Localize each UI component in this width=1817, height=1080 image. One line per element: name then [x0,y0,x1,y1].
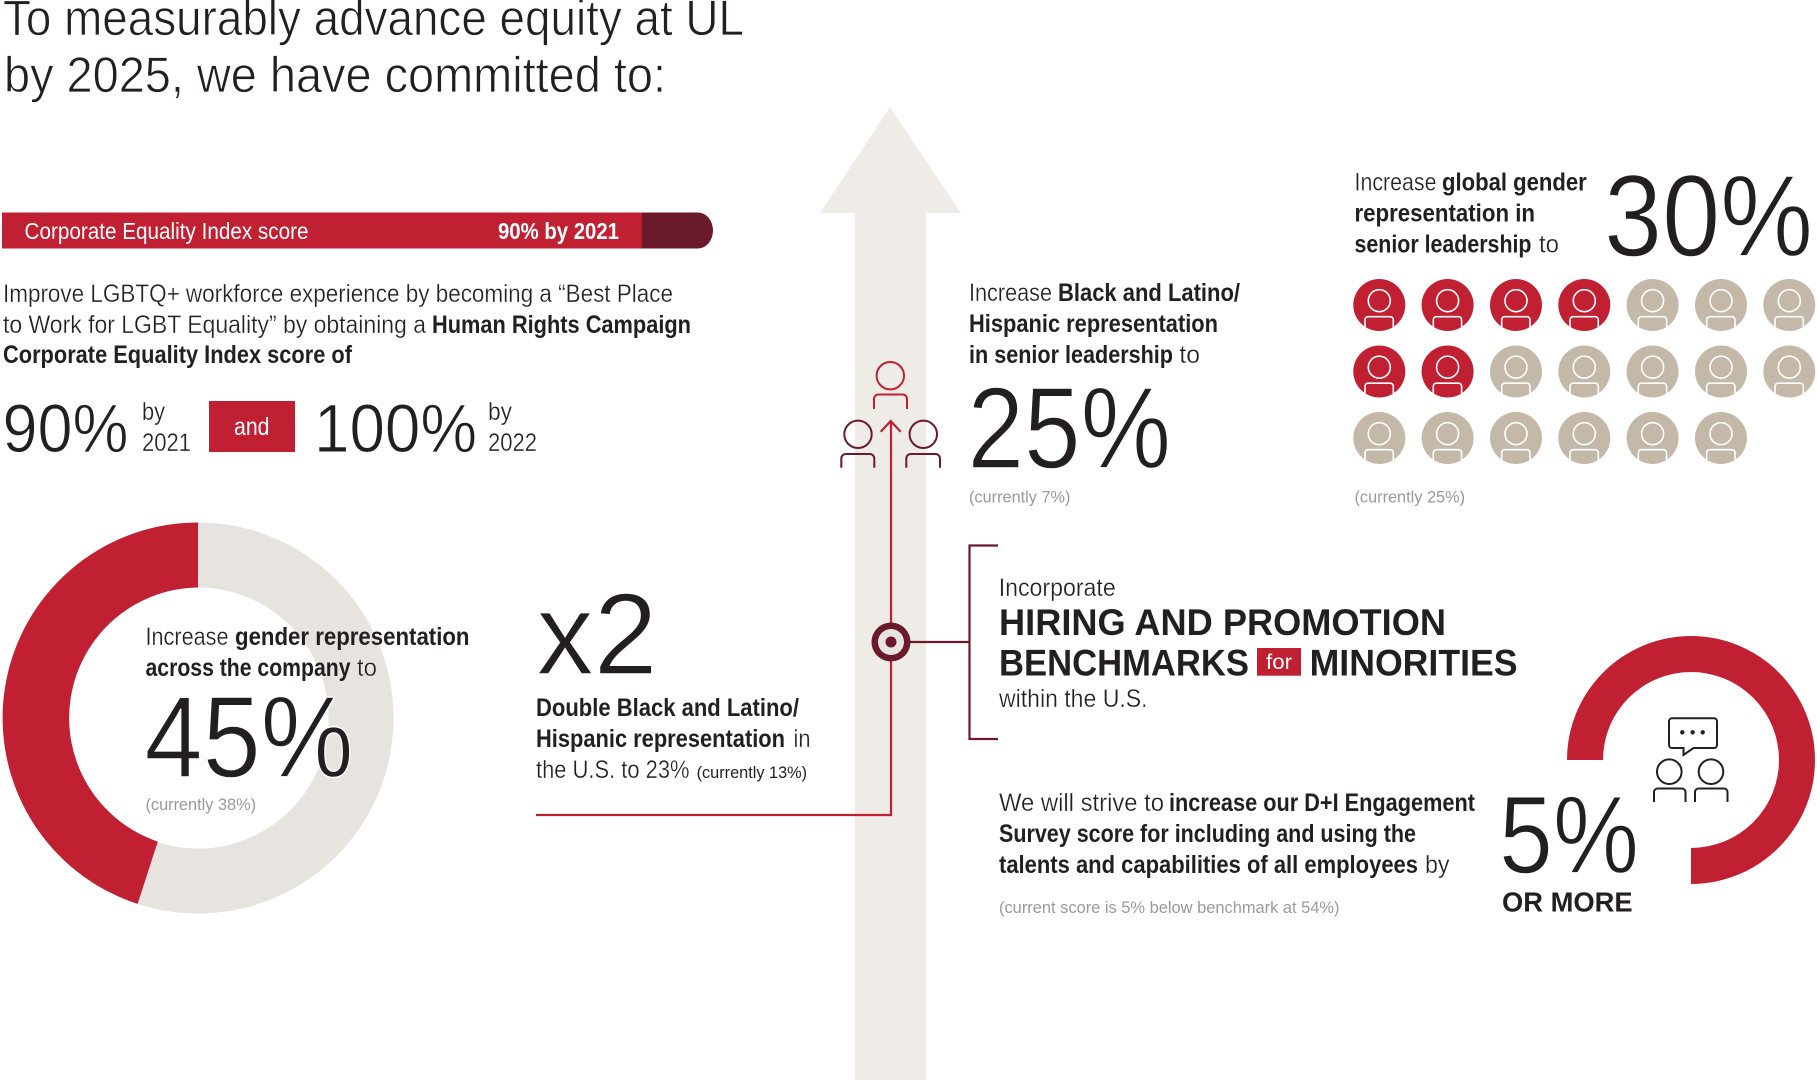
text: Black and Latino/Hispanic senior leadership 25%: in senior leadership [969,341,1173,369]
stat: x2 double representation: in [794,725,810,753]
text: D+I engagement survey: increase our D+I Engagement [1169,789,1476,817]
stat: 90% by 2021 and 100% by 2022 [2,390,537,467]
text: Black and Latino/Hispanic senior leadership 25% [968,279,1240,507]
text: global gender representation 30%: representation in [1354,200,1535,228]
stat: x2 double representation: the U.S. to 23% [536,756,690,784]
text: Black and Latino/Hispanic senior leadership 25%: 25% [968,363,1171,493]
note: currently 25%: (currently 25%) [1354,488,1465,507]
stat: 90% by 2021 and 100% by 2022: and [234,413,270,441]
text: gender representation target: 45% [144,672,354,802]
text: D+I engagement survey: (current score is 5% below benchmark at 54%) [999,898,1340,917]
text: gender representation target: to [357,654,377,682]
text: D+I engagement survey [999,789,1476,917]
stat: x2 double representation: Hispanic representation [536,725,785,753]
text: hiring and promotion benchmarks [998,574,1518,713]
stat: 90% by 2021 and 100% by 2022: 100% [314,390,477,467]
text: Black and Latino/Hispanic senior leadership 25%: to [1179,341,1200,369]
text: hiring and promotion benchmarks: Incorporate [999,574,1116,602]
text: D+I engagement survey: Survey score for including and using the [999,820,1416,848]
text: Black and Latino/Hispanic senior leadership 25%: Hispanic representation [969,310,1218,338]
stat: 5% or more: 5% [1499,774,1639,897]
text: D+I engagement survey: by [1425,851,1450,879]
stat: 90% by 2021 and 100% by 2022: by [142,398,165,426]
text: LGBTQ+ workforce experience: to Work for LGBT Equality” by obtaining a [3,311,426,339]
progress bar: Corporate Equality Index score [2,212,713,248]
text: gender representation target: Increase [146,623,228,651]
stat: 90% by 2021 and 100% by 2022: 2022 [488,429,537,457]
text: global gender representation 30%: global gender [1442,169,1587,197]
text: LGBTQ+ workforce experience: Human Rights Campaign [432,311,691,339]
text: gender representation target [144,623,470,814]
text: gender representation target: across the company [146,654,351,682]
text: hiring and promotion benchmarks: within the U.S. [998,685,1148,713]
text: hiring and promotion benchmarks: BENCHMARKS [999,643,1249,684]
text: D+I engagement survey: talents and capabilities of all employees [999,851,1418,879]
text: Black and Latino/Hispanic senior leadership 25%: Black and Latino/ [1058,279,1240,307]
progress bar: Corporate Equality Index score: 90% by 2021 [498,218,619,244]
title: by 2025, we have committed to: [4,47,666,103]
pictogram: 20 people, 6 highlighted [1353,279,1815,464]
text: LGBTQ+ workforce experience [3,280,691,369]
text: LGBTQ+ workforce experience: Corporate Equality Index score of [3,341,353,369]
stat: x2 double representation [536,569,810,784]
stat: x2 double representation: (currently 13%) [697,763,807,782]
text: global gender representation 30%: to [1539,231,1559,259]
text: D+I engagement survey: We will strive to [999,789,1164,817]
text: global gender representation 30%: Increase [1354,169,1436,197]
text: Black and Latino/Hispanic senior leadership 25%: Increase [969,279,1052,307]
text: global gender representation 30%: senior leadership [1354,231,1532,259]
icon: target node on arrow [872,622,910,662]
stat: 90% by 2021 and 100% by 2022: 90% [2,390,128,467]
stat: x2 double representation: x2 [536,569,658,699]
stat: 90% by 2021 and 100% by 2022: 2021 [142,429,191,457]
stat: 90% by 2021 and 100% by 2022: by [488,398,512,426]
stat: x2 double representation: Double Black and Latino/ [536,694,799,722]
text: global gender representation 30% [1354,151,1813,281]
bracket connector [905,546,998,739]
text: hiring and promotion benchmarks: for [1266,651,1292,674]
ring chart: engagement [1567,636,1815,884]
text: LGBTQ+ workforce experience: Improve LGBTQ+ workforce experience by becoming a “Best Place [3,280,673,308]
donut chart: gender representation 45% [3,522,361,904]
background upward arrow [820,107,961,1080]
text: hiring and promotion benchmarks: HIRING AND PROMOTION [999,602,1446,643]
text: hiring and promotion benchmarks: MINORITIES [1310,643,1518,684]
text: Black and Latino/Hispanic senior leadership 25%: (currently 7%) [969,488,1070,507]
connector: red line up to arrow [536,421,901,815]
text: gender representation target: gender representation [235,623,470,651]
stat: 5% or more: OR MORE [1502,887,1633,918]
progress bar: Corporate Equality Index score: Corporate Equality Index score [24,218,308,244]
text: gender representation target: (currently 38%) [146,795,256,814]
icon: two people with speech bubble [1654,718,1728,802]
title [3,0,744,103]
icon: three people [841,362,940,468]
